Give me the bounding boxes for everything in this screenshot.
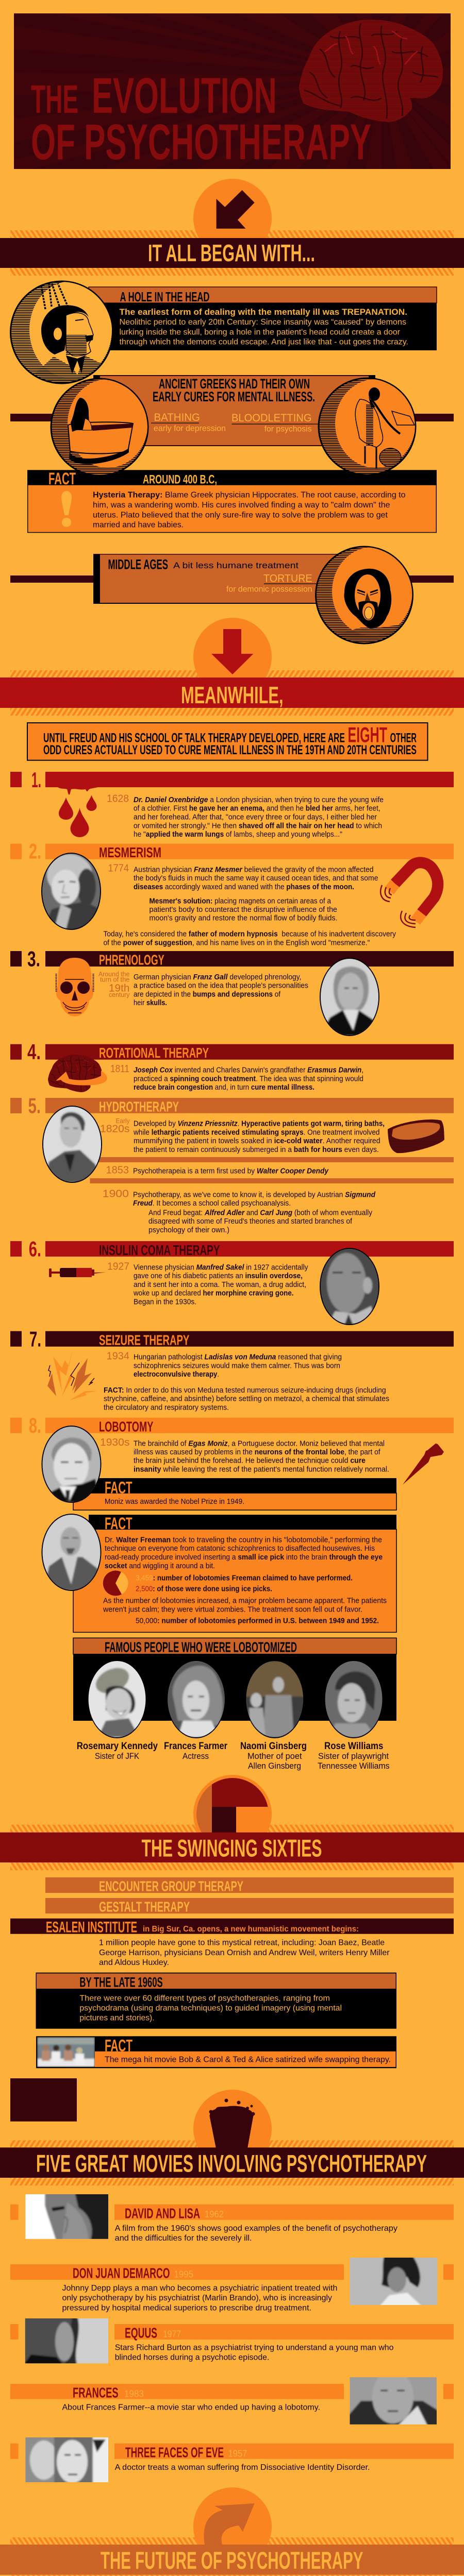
movie: frances: About Frances Farmer--a movie star who ended up having a lobotomy.: [62, 2403, 320, 2412]
movie: equus: 1977: [163, 2329, 181, 2340]
person: Naomi Ginsberg: Mother of poet: [247, 1751, 302, 1761]
panel: fact Nobel prize: [73, 1478, 396, 1510]
text: priessnitz: while lethargic patients received stimulating sprays. One treatment involved: [133, 1128, 379, 1137]
text: sakel: [133, 1263, 308, 1307]
panel: famous people who were lobotomized: FAMOUS PEOPLE WHO WERE LOBOTOMIZED: [105, 1639, 297, 1655]
text: oxenbridge: and her forehead. After that, "once every three or four days, I either bled her: [134, 813, 377, 821]
text: moniz: insanity while leaving the rest of the patient's mental function relatively normal.: [134, 1466, 389, 1474]
person: Rosemary Kennedy: Sister of JFK: [95, 1751, 140, 1761]
photo: equus: [23, 2316, 111, 2366]
band: esalen institute: ESALEN INSTITUTE: [46, 1919, 137, 1936]
icon: popcorn: [193, 2090, 272, 2168]
movie: david and lisa: 1962: [205, 2209, 224, 2219]
panel: fact Walter Freeman: [73, 1514, 396, 1632]
text: esalen visitors: [99, 1939, 390, 1967]
portrait: Vinzenz Priessnitz: [42, 1106, 102, 1182]
panel: by the late 1960s: pictures and stories).: [79, 2014, 155, 2023]
text: mesmer belief: diseases accordingly waxed and waned with the phases of the moon.: [134, 883, 354, 891]
text: lobotomobile: road-ready procedure involved inserting a small ice pick into the brain through the eye: [105, 1553, 383, 1562]
timeline: 1853: [106, 1164, 329, 1176]
section banner: five great movies: [0, 2090, 464, 2185]
text: meduna: strychnine, caffeine, and absinthe) before settling on metrazol, a chemical that stimulates: [104, 1395, 389, 1403]
dark block: [10, 2078, 77, 2122]
cure 1: bloodletting band: 1628: [107, 793, 129, 805]
cure 7: seizure therapy: 7.: [29, 1327, 41, 1351]
cure 1: bloodletting band: [10, 768, 454, 839]
cure 6: insulin coma therapy: 6.: [29, 1236, 41, 1261]
band: esalen institute: in Big Sur, Ca. opens, a new humanistic movement begins:: [143, 1925, 359, 1934]
icon: skull: [56, 958, 93, 1016]
text: esalen visitors: 1 million people have gone to this mystical retreat, including: Joan Baez, Beatle: [99, 1939, 385, 1947]
cure 2: mesmerism: [10, 839, 454, 947]
photo: frances: [347, 2370, 439, 2427]
panel: fact bob and carol: FACT: [105, 2037, 132, 2055]
text: meduna: [104, 1353, 389, 1412]
movie: frances: FRANCES: [73, 2384, 119, 2400]
panel: by the late 1960s: BY THE LATE 1960S: [79, 1975, 163, 1990]
text: moniz: The brainchild of Egas Moniz, a Portuguese doctor. Moniz believed that mental: [134, 1439, 385, 1448]
text: oxenbridge: or vomited her strongly." He then shaved off all the hair on her head to which: [134, 822, 382, 830]
text: moniz: illness was caused by problems in the neurons of the frontal lobe, the part of: [134, 1448, 381, 1456]
text: mesmer belief: [103, 866, 396, 947]
movie: don juan demarco: DON JUAN DEMARCO: [73, 2265, 170, 2281]
cure 6: insulin coma therapy: [10, 1236, 454, 1325]
text: lobotomobile: Dr. Walter Freeman took to traveling the country in his "lobotomobile," performing the: [105, 1536, 382, 1544]
icon: exclamation mark: [61, 491, 72, 527]
icon: down arrow circle: [193, 618, 272, 696]
cure 7: seizure therapy: [10, 1327, 454, 1412]
section banner: meanwhile: [0, 618, 464, 716]
text: mesmer belief: Mesmer's solution: placing magnets on certain areas of a: [150, 897, 332, 905]
panel: ancient greeks: [10, 375, 454, 446]
timeline: 1900: Freud. It becomes a school called psychoanalysis.: [133, 1199, 291, 1208]
band: esalen institute: [10, 1919, 454, 1936]
portrait: Egas Moniz: [42, 1426, 102, 1502]
text: sakel: Began in the 1930s.: [134, 1298, 196, 1307]
text: oxenbridge: of a clothier. First he gave her an enema, and then he bled her arms, her feet,: [134, 805, 380, 813]
person: Frances Farmer: Frances Farmer: [164, 1741, 228, 1752]
person: Frances Farmer: Actress: [183, 1751, 209, 1761]
section banner: the future of psychotherapy: [0, 2487, 464, 2576]
text: hysteria therapy: married and have babies.: [93, 520, 184, 529]
cure 2: mesmerism: MESMERISM: [99, 844, 161, 860]
text: meduna: the circulatory and respiratory systems.: [104, 1403, 229, 1412]
portrait: Franz Mesmer: [41, 853, 101, 929]
stat: 3,459 lobotomies: 3,459: number of lobotomies Freeman claimed to have performed.: [136, 1574, 353, 1583]
timeline: 1900: disagreed with some of Freud's theories and started branches of: [148, 1217, 353, 1226]
cure 4: rotational therapy: [10, 1040, 454, 1092]
movie: frances: [10, 2370, 454, 2427]
text: sakel: gave one of his diabetic patients an insulin overdose,: [134, 1272, 303, 1280]
cure: bloodletting: for psychosis: [264, 425, 312, 434]
panel: middle ages: TORTURE: [263, 572, 312, 584]
cure: bloodletting: [231, 412, 318, 434]
cure 3: phrenology: PHRENOLOGY: [99, 952, 164, 968]
band: encounter group therapy: [45, 1877, 454, 1894]
person: Naomi Ginsberg: Allen Ginsberg: [248, 1761, 301, 1771]
person: Rose Williams: Rose Williams: [324, 1741, 383, 1752]
cure 6: insulin coma therapy: INSULIN COMA THERAPY: [99, 1242, 220, 1258]
stat: 50,000 lobotomies: 50,000: number of lobotomies performed in U.S. between 1949 and 1952.: [136, 1617, 379, 1625]
title: THE: [31, 77, 78, 122]
section banner: meanwhile: MEANWHILE,: [181, 682, 284, 708]
panel: a hole in the head: through which the demons could escape. And just like that - out goes the crazy.: [120, 338, 408, 347]
person: Rose Williams: Tennessee Williams: [318, 1761, 390, 1771]
text: spinning couch: practiced a spinning couch treatment. The idea was that spinning would: [134, 1075, 363, 1083]
movie: equus: blinded horses during a psychotic episode.: [115, 2353, 269, 2362]
cure 8: lobotomy: [0, 1413, 464, 2576]
movie: don juan demarco: Johnny Depp plays a man who becomes a psychiatric inpatient treated with: [62, 2284, 337, 2293]
icon: woman bathing: [51, 379, 148, 476]
cure 2: mesmerism: 1774: [108, 863, 129, 874]
text: franz gall: are depicted in the bumps and depressions of: [134, 990, 281, 998]
panel: a hole in the head: The earliest form of dealing with the mentally ill was TREPANATION.: [120, 307, 407, 317]
panel: a hole in the head: [89, 287, 437, 350]
timeline: 1900: [103, 1188, 376, 1234]
panel: by the late 1960s: [36, 1973, 396, 2029]
text: hysteria therapy: [93, 491, 406, 529]
panel: middle ages: for demonic possession: [226, 585, 312, 594]
cure 8: lobotomy: 8.: [29, 1413, 41, 1437]
panel: fact bob and carol: [36, 2036, 396, 2068]
panel: by the late 1960s: There were over 60 different types of psychotherapies, ranging from: [79, 1994, 330, 2003]
section banner: the swinging sixties: THE SWINGING SIXTIES: [141, 1834, 322, 1861]
text: spinning couch: Joseph Cox invented and Charles Darwin's grandfather Erasmus Darwin,: [134, 1066, 363, 1075]
person: Rosemary Kennedy: Rosemary Kennedy: [77, 1741, 158, 1752]
portrait: Franz Gall: [320, 958, 379, 1036]
timeline: 1853: 1853: [106, 1164, 129, 1176]
cure: bathing: [151, 412, 226, 433]
movie: three faces of eve: 1957: [228, 2448, 247, 2459]
cure 5: hydrotherapy: 5.: [28, 1093, 41, 1118]
text: hysteria therapy: uterus. Plato believed that the only sure-fire way to solve the problem was to get: [93, 511, 388, 519]
cure 4: rotational therapy: 1811: [110, 1063, 129, 1075]
date: early 1820s: [100, 1117, 130, 1134]
text: priessnitz: Developed by Vinzenz Priessnitz. Hyperactive patients got warm, tiring baths,: [134, 1120, 385, 1128]
timeline: 1900: psychology of their own.): [148, 1226, 229, 1234]
text: franz gall: [134, 973, 308, 1007]
text: meduna: electroconvulsive therapy.: [134, 1370, 219, 1379]
cure 8: lobotomy: LOBOTOMY: [99, 1418, 154, 1434]
text: moniz: [134, 1439, 389, 1474]
text: mesmer belief: the body's fluids in much the same way it caused ocean tides, and that some: [134, 874, 378, 883]
date: around the turn of the 19th century: Around the: [98, 970, 129, 978]
cure 7: seizure therapy: SEIZURE THERAPY: [99, 1332, 190, 1348]
cure 5: hydrotherapy: HYDROTHERAPY: [99, 1098, 179, 1114]
intro callout: eight other cures: EIGHT: [347, 723, 387, 747]
cure 7: seizure therapy: 1934: [107, 1350, 129, 1362]
movie: don juan demarco: only psychotherapy by his psychiatrist (Marlin Brando), who is increasingly: [62, 2294, 332, 2302]
movie: frances: 1983: [124, 2388, 144, 2399]
icon: brain: [299, 20, 443, 122]
timeline: 1853: Psychotherapeia is a term first used by Walter Cooper Dendy: [133, 1167, 329, 1176]
text: mesmer belief: Austrian physician Franz Mesmer believed the gravity of the moon affected: [134, 866, 373, 874]
icon: syringe: [49, 1268, 106, 1277]
stat: 2,500 ice picks: 2,500: of those were done using ice picks.: [136, 1584, 272, 1593]
icon: arrow circle: [193, 179, 272, 257]
panel: a hole in the head: A HOLE IN THE HEAD: [120, 289, 209, 304]
panel: fact around 400 bc: [27, 469, 437, 533]
timeline: 1900: 1900: [103, 1188, 129, 1199]
title: EVOLUTION: [92, 67, 277, 124]
cure 3: phrenology: 3.: [27, 947, 40, 971]
text: lobotomobile: [105, 1536, 383, 1570]
cure 8: lobotomy: 1930s: [100, 1437, 129, 1448]
text: oxenbridge: he "applied the warm lungs of lambs, sheep and young whelps...": [134, 831, 342, 839]
movie: don juan demarco: pressured by hospital medical superiors to prescribe drug treatment.: [62, 2303, 311, 2312]
cure: bathing: early for depression: [154, 425, 226, 433]
icon: lightning bolts: [47, 1349, 97, 1400]
text: mesmer belief: moon's gravity and restore the normal flow of bodily fluids.: [150, 914, 337, 923]
cure 2: mesmerism: 2.: [29, 839, 41, 863]
portrait: Walter Freeman: [42, 1514, 102, 1590]
movie: david and lisa: A film from the 1960's shows good examples of the benefit of psychotherapy: [115, 2224, 397, 2233]
text: franz gall: a practice based on the idea that people's personalities: [134, 982, 308, 990]
photo: david and lisa: [23, 2192, 111, 2241]
panel: ancient greeks: ANCIENT GREEKS HAD THEIR OWN: [159, 376, 310, 392]
text: hysteria therapy: him, was a wandering womb. His cures involved finding a way to "calm down" the: [93, 501, 390, 510]
text: sakel: woke up and declared her morphine craving gone.: [133, 1290, 294, 1298]
panel: by the late 1960s: psychodrama (using drama techniques) to guided imagery (using mental: [79, 2004, 342, 2012]
date: early 1820s: Early: [115, 1117, 130, 1125]
text: priessnitz: [133, 1120, 385, 1154]
text: meduna: Hungarian pathologist Ladislas von Meduna reasoned that giving: [134, 1353, 342, 1362]
text: zombies: weren't just calm; they were virtual zombies. The treatment soon fell out of favor.: [103, 1606, 362, 1614]
text: priessnitz: mummifying the patient in towels soaked in ice-cold water. Another required: [134, 1137, 380, 1145]
movie: equus: [10, 2316, 454, 2366]
cure 4: rotational therapy: ROTATIONAL THERAPY: [99, 1045, 209, 1061]
text: lobotomobile: technique on everyone from catatonic schizophrenics to disaffected housewives. His: [105, 1545, 375, 1553]
cure 4: rotational therapy: 4.: [27, 1040, 41, 1064]
date: around the turn of the 19th century: century: [109, 991, 130, 998]
text: zombies: As the number of lobotomies increased, a major problem became apparent. The patients: [103, 1597, 387, 1605]
portrait: Manfred Sakel: [320, 1248, 379, 1325]
cure: bloodletting: BLOODLETTING: [231, 412, 311, 424]
text: mesmer belief: of the power of suggestion, and his name lives on in the English word "mesmerize.": [103, 939, 370, 947]
band: encounter group therapy: ENCOUNTER GROUP THERAPY: [99, 1878, 243, 1894]
date: around the turn of the 19th century: 19th: [109, 982, 129, 994]
text: sakel: Viennese physician Manfred Sakel in 1927 accidentally: [134, 1263, 308, 1272]
movie: equus: Stars Richard Burton as a psychiatrist trying to understand a young man who: [115, 2344, 394, 2352]
panel: fact bob and carol: The mega hit movie Bob & Carol & Ted & Alice satirized wife swapping therapy.: [105, 2055, 391, 2064]
panel: a hole in the head: Neolithic period to early 20th Century: Since insanity was “caused” by demons: [120, 318, 406, 327]
movie: don juan demarco: 1995: [174, 2269, 193, 2280]
text: mesmer belief: Today, he's considered the father of modern hypnosis because of his inadvertent discovery: [103, 930, 396, 939]
person: Naomi Ginsberg: [240, 1660, 307, 1771]
icon: spinning brain: [48, 1055, 107, 1092]
panel: middle ages: A bit less humane treatment: [173, 561, 299, 570]
icon: horseshoe magnet: [380, 862, 438, 927]
text: oxenbridge: [134, 796, 384, 839]
movie: david and lisa: [10, 2192, 454, 2243]
pie chart: ice pick share: [103, 1570, 128, 1596]
icon: curved arrow circle: [193, 2487, 272, 2566]
cure 5: hydrotherapy: [10, 1093, 454, 1234]
icon: bath tub: [388, 1120, 444, 1153]
text: spinning couch: [134, 1066, 363, 1092]
timeline: 1900: Psychotherapy, as we've come to know it, is developed by Austrian Sigmund: [133, 1191, 376, 1199]
photo: don juan demarco: [347, 2256, 440, 2307]
person: Rose Williams: Sister of playwright: [318, 1751, 389, 1761]
icon: screaming man: [316, 546, 413, 644]
movie: don juan demarco: [10, 2256, 454, 2312]
text: franz gall: German physician Franz Gall developed phrenology,: [134, 973, 301, 981]
person: Rosemary Kennedy: [77, 1660, 158, 1761]
text: moniz: the brain just behind the forehead. He believed the technique could cure: [134, 1457, 366, 1465]
icon: colour block circle: [193, 1775, 274, 1853]
section banner: it all began with: IT ALL BEGAN WITH...: [148, 240, 315, 266]
section banner: it all began with: [0, 179, 464, 276]
text: lobotomobile: socket and wiggling it around a bit.: [105, 1562, 215, 1570]
header panel: [14, 13, 451, 170]
panel: a hole in the head: lurking inside the skull, boring a hole in the patient's head could create a door: [120, 328, 401, 336]
icon: ice pick: [403, 1444, 444, 1485]
movie: three faces of eve: [10, 2435, 454, 2484]
panel: fact around 400 bc: FACT: [48, 469, 76, 488]
movie: equus: EQUUS: [125, 2325, 157, 2341]
title: [31, 67, 371, 170]
text: spinning couch: reduce brain congestion and, in turn cure mental illness.: [134, 1083, 314, 1092]
section banner: the swinging sixties: [0, 1775, 464, 1870]
person: Rose Williams: [318, 1660, 390, 1771]
text: mesmer belief: patient's body to counteract the disruptive influence of the: [150, 906, 337, 914]
text: zombies: [103, 1597, 387, 1614]
icon: man bloodletting: [318, 378, 416, 476]
text: oxenbridge: Dr. Daniel Oxenbridge a London physician, when trying to cure the young wife: [134, 796, 384, 804]
text: esalen visitors: George Harrison, physicians Dean Ornish and Andrew Weil, writers Henry Miller: [99, 1948, 390, 1957]
band: gestalt therapy: GESTALT THERAPY: [99, 1899, 190, 1915]
text: hysteria therapy: Hysteria Therapy: Blame Greek physician Hippocrates. The root cause, according to: [93, 491, 406, 500]
panel: fact Walter Freeman: FACT: [105, 1514, 132, 1533]
intro callout: eight other cures: [27, 723, 428, 760]
cure: bathing: BATHING: [154, 412, 200, 423]
intro callout: eight other cures: OTHER: [390, 731, 417, 745]
photo: three faces of eve: [23, 2435, 111, 2484]
person: Naomi Ginsberg: Naomi Ginsberg: [240, 1741, 307, 1752]
panel: famous people who were lobotomized: [73, 1638, 396, 1771]
panel: fact Nobel prize: FACT: [105, 1478, 132, 1497]
text: meduna: schizophrenics seizures would make them calmer. Thus was born: [134, 1362, 340, 1370]
date: around the turn of the 19th century: [98, 970, 130, 998]
panel: middle ages: MIDDLE AGES: [108, 557, 168, 572]
panel: fact Nobel prize: Moniz was awarded the Nobel Prize in 1949.: [105, 1498, 244, 1506]
cure 6: insulin coma therapy: 1927: [107, 1261, 129, 1272]
text: franz gall: heir skulls.: [134, 999, 167, 1007]
date: early 1820s: 1820s: [100, 1123, 129, 1134]
movie: david and lisa: and the difficulties for the severely ill.: [115, 2234, 252, 2243]
panel: fact around 400 bc: AROUND 400 B.C,: [143, 472, 217, 486]
panel: middle ages: [10, 554, 454, 604]
date: around the turn of the 19th century: turn of the: [100, 976, 129, 984]
movie: three faces of eve: A doctor treats a woman suffering from Dissociative Identity Disorder.: [115, 2463, 370, 2472]
text: meduna: FACT: In order to do this von Meduna tested numerous seizure-inducing drugs (including: [104, 1386, 386, 1395]
cure 3: phrenology: [10, 947, 454, 1036]
icon: trepanation portrait: [10, 281, 113, 385]
person: Frances Farmer: [164, 1660, 228, 1761]
photo: bob and carol and ted and alice: [37, 2037, 95, 2067]
movie: three faces of eve: THREE FACES OF EVE: [125, 2444, 224, 2460]
text: priessnitz: the patient to remain continuously submerged in a bath for hours even days.: [134, 1146, 379, 1154]
text: sakel: and it sent her into a coma. The woman, a drug addict,: [134, 1281, 306, 1289]
panel: ancient greeks: EARLY CURES FOR MENTAL ILLNESS.: [153, 389, 315, 404]
icon: blood drops: [58, 787, 98, 837]
cure 1: bloodletting band: 1.: [31, 768, 41, 792]
movie: david and lisa: DAVID AND LISA: [125, 2205, 200, 2221]
text: esalen visitors: and Aldous Huxley.: [99, 1958, 169, 1967]
timeline: 1900: And Freud begat: Alfred Adler and Carl Jung (both of whom eventually: [148, 1209, 373, 1217]
band: gestalt therapy: [45, 1898, 454, 1915]
